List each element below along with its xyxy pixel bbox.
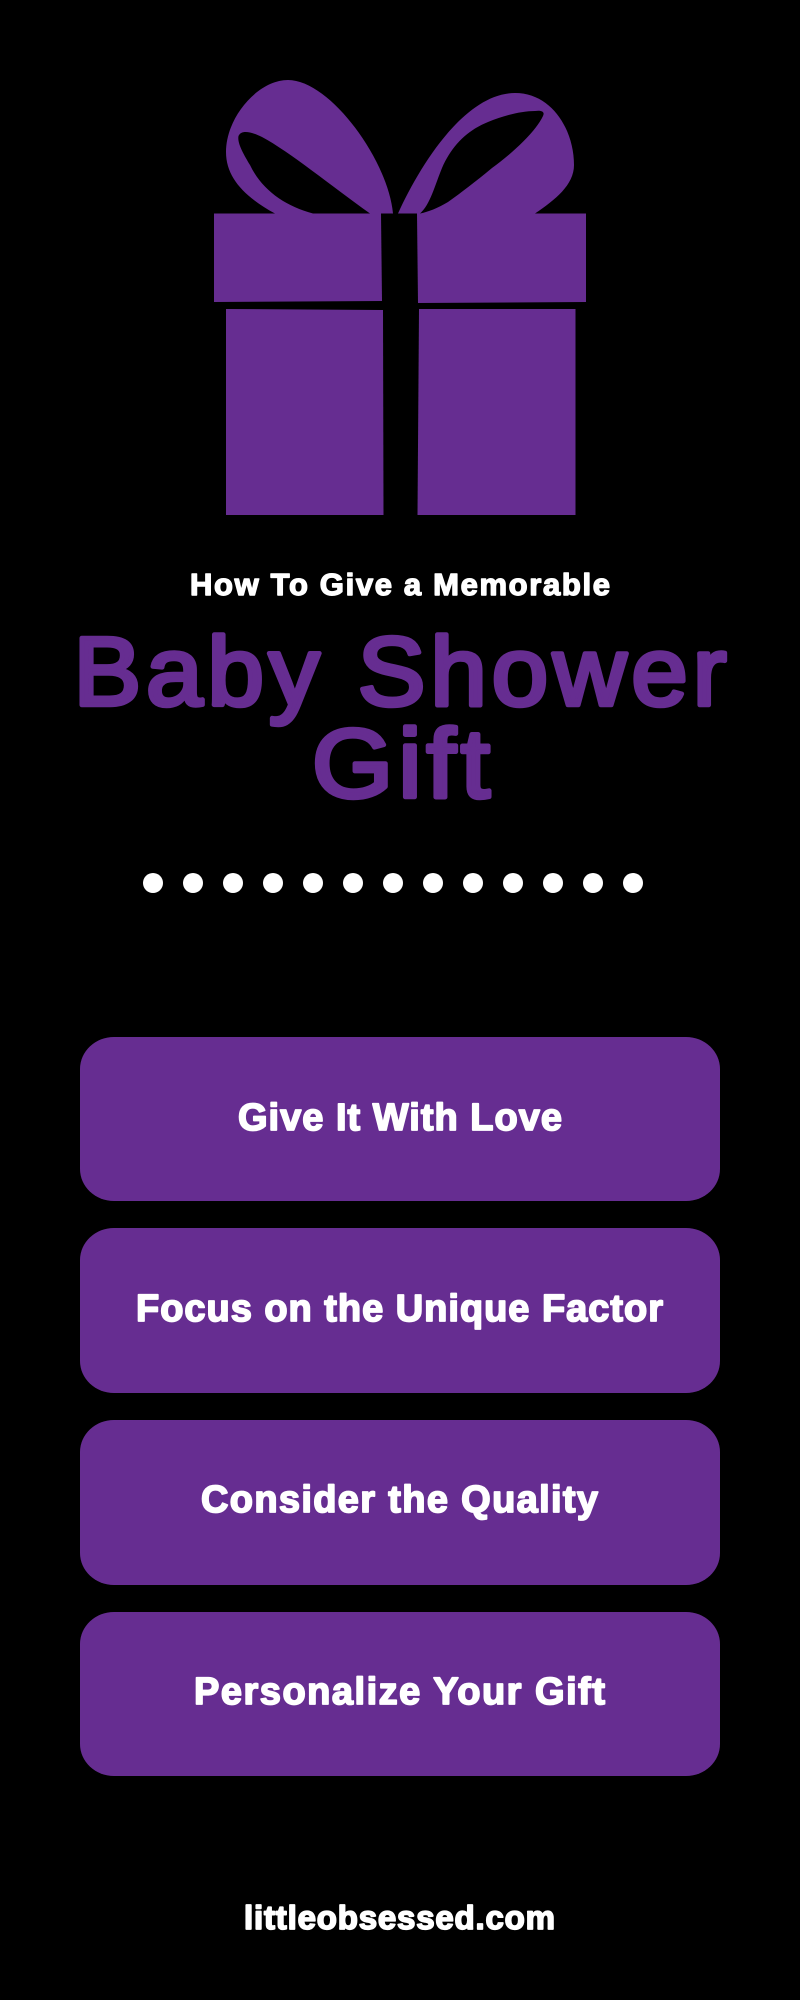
title line 1: Baby Shower xyxy=(74,617,732,726)
icon: right bow loop xyxy=(398,93,574,214)
panel: focus on the unique factor: Focus on the Unique Factor xyxy=(136,1288,663,1330)
icon: left bow loop xyxy=(226,80,393,214)
panel: consider the quality: Consider the Quality xyxy=(201,1479,598,1521)
panel: personalize your gift: Personalize Your Gift xyxy=(194,1671,605,1713)
title line 2: Gift xyxy=(312,709,495,818)
icon: lid left xyxy=(214,214,382,302)
subtitle: How To Give a Memorable xyxy=(190,567,610,602)
panel: consider the quality xyxy=(80,1420,720,1585)
panel: focus on the unique factor xyxy=(80,1228,720,1393)
panel: personalize your gift xyxy=(80,1612,720,1776)
panel: give it with love: Give It With Love xyxy=(238,1097,562,1139)
main title xyxy=(74,617,732,818)
icon: box left xyxy=(226,309,384,515)
icon: gift box with bow xyxy=(214,80,586,515)
dotted divider xyxy=(143,873,643,893)
footer website: littleobsessed.com xyxy=(244,1899,555,1936)
icon: box right xyxy=(418,309,576,515)
panel: give it with love xyxy=(80,1037,720,1201)
icon: lid right xyxy=(417,214,586,303)
